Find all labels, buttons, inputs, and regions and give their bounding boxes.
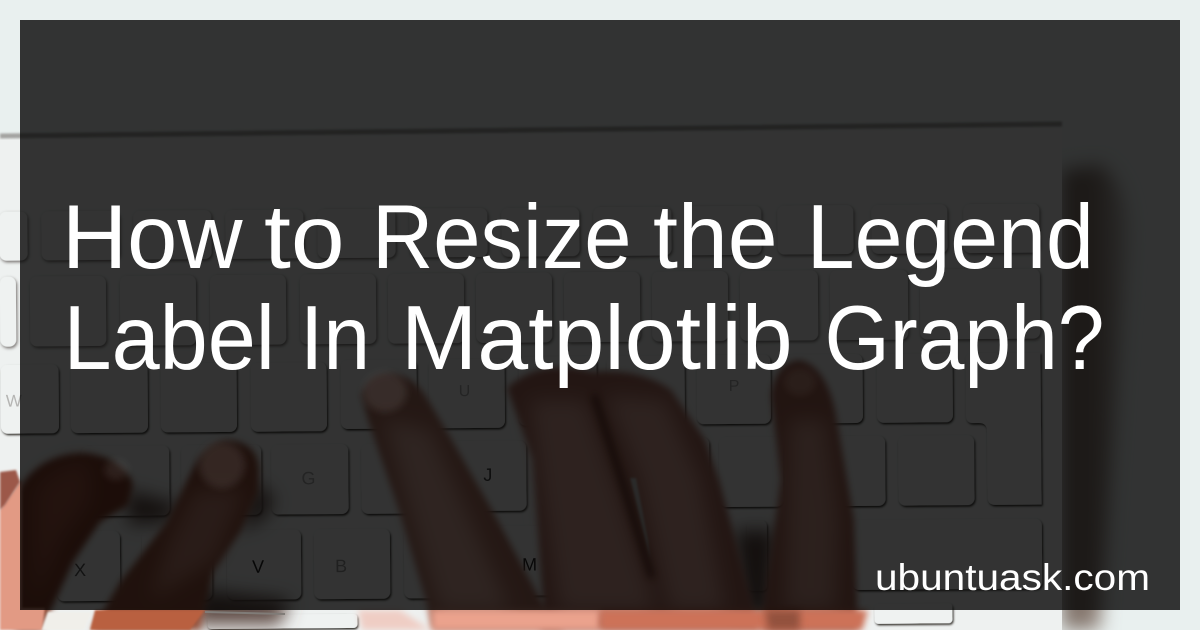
hands and fingers: [15, 360, 858, 630]
finger 4 and 5: [507, 368, 760, 630]
key letters: B: [335, 556, 347, 576]
keyboard keys: lower rows: [0, 353, 1043, 630]
finger 6: [760, 360, 858, 630]
title line 2: In: [300, 288, 370, 389]
key letters: G: [301, 468, 315, 488]
key letters: M: [522, 555, 537, 575]
finger 3: [361, 373, 565, 630]
title line 1: Resize: [372, 187, 632, 288]
bottom strip colours: [90, 610, 205, 630]
title: [62, 187, 1104, 389]
key letters: U: [459, 383, 470, 400]
title line 1: How: [62, 187, 243, 288]
red patch at left edge: [0, 470, 20, 510]
key letters: X: [74, 560, 86, 580]
title line 2: Graph?: [824, 288, 1104, 389]
keyboard keys: upper rows: [0, 204, 1040, 347]
light gap between fingers: [630, 478, 648, 547]
dark crease between fingers: [594, 395, 652, 578]
fingernail highlights: [104, 368, 816, 488]
title line 1: [62, 187, 1094, 288]
key letters: W: [6, 392, 22, 411]
key letters: [6, 378, 741, 581]
finger 2: [92, 440, 259, 630]
title line 1: the: [653, 187, 778, 288]
finger 1: [15, 453, 133, 630]
keyboard top edge: [0, 124, 1062, 136]
keyboard shadow: [1062, 165, 1128, 630]
title line 2: Label: [64, 288, 275, 389]
background photo: keyboard and hands: [0, 122, 1125, 630]
title line 1: to: [264, 187, 345, 288]
key letters: P: [729, 378, 739, 395]
keyboard body: [1046, 172, 1062, 630]
title line 2: Matplotlib: [401, 288, 793, 389]
title line 2: [64, 288, 1104, 389]
hand shadows: [125, 480, 775, 625]
key letters: V: [252, 557, 264, 577]
strip of white keyboard at bottom: [41, 610, 55, 630]
title line 1: Legend: [807, 187, 1094, 288]
site name: ubuntuask.com: [875, 557, 1150, 598]
key letters: J: [483, 465, 492, 485]
skin at left edge: [0, 480, 45, 630]
